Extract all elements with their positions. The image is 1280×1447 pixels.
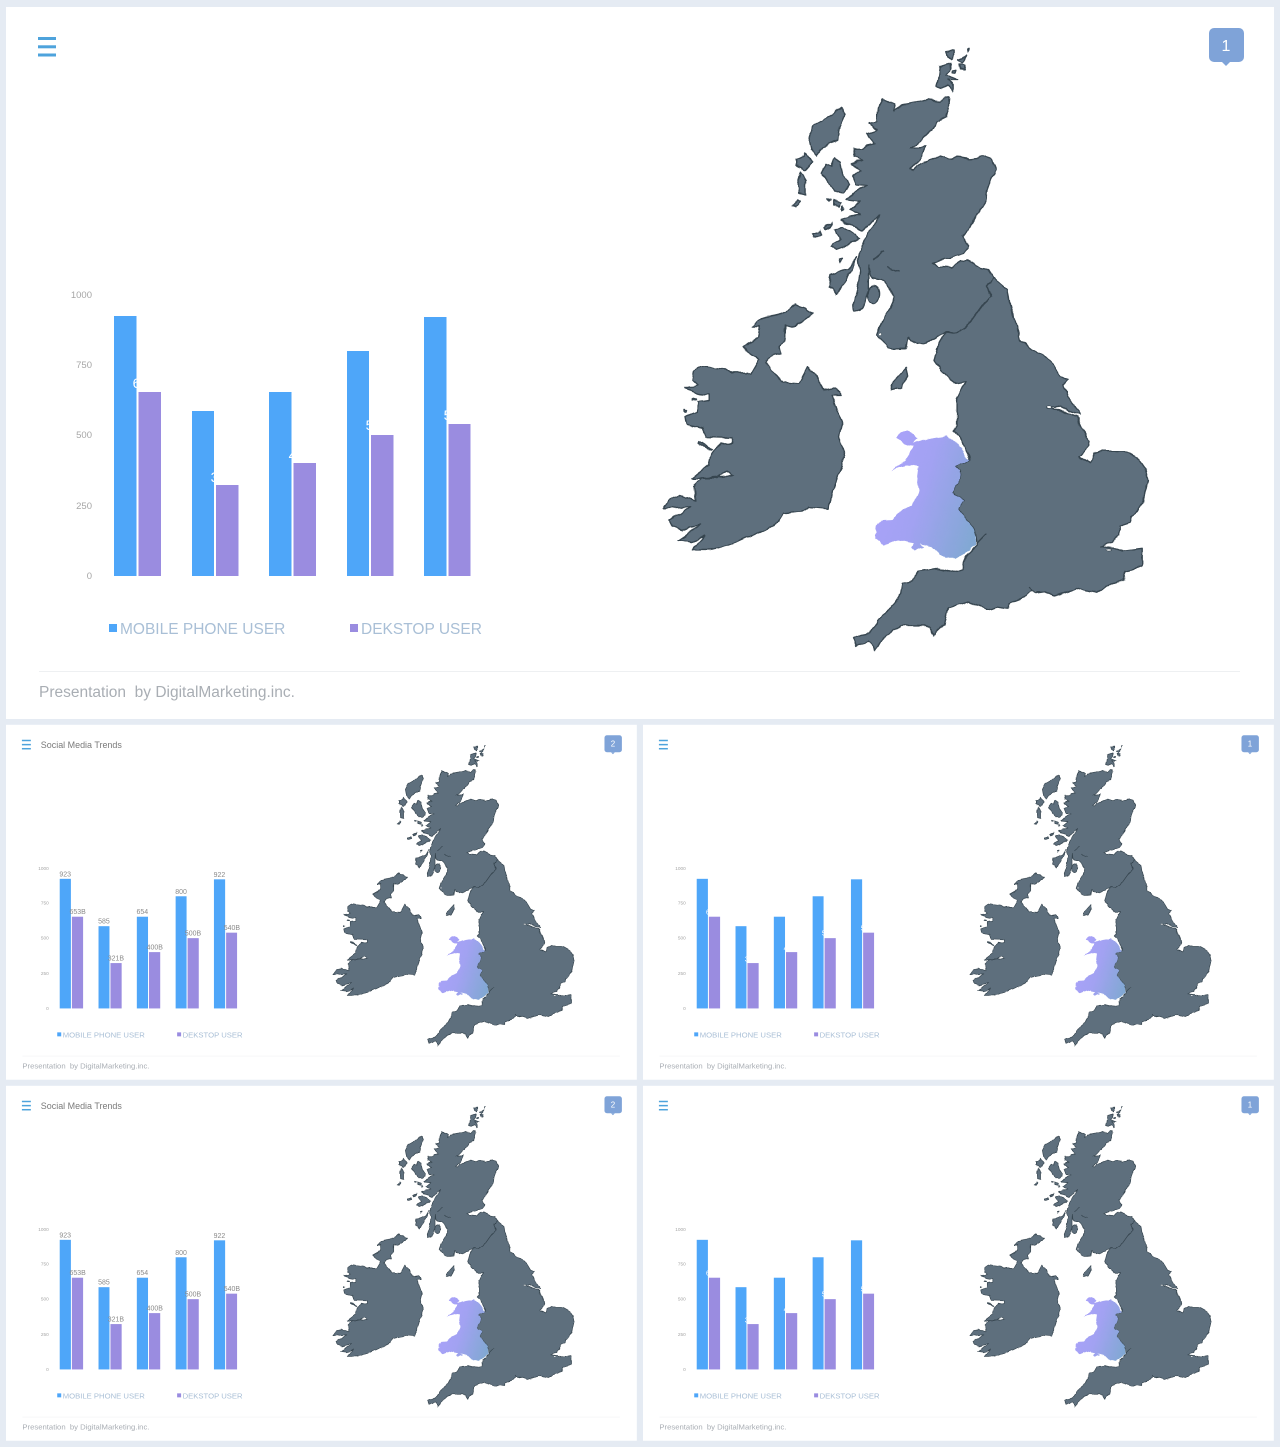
footer text: Presentation by DigitalMarketing.inc. [22,1423,149,1432]
y axis labels: 250 [678,971,686,977]
hidden-edge value labels [133,375,476,485]
value labels: 923 [59,871,71,878]
slide number badge [1241,1096,1259,1115]
y axis labels: 250 [76,501,92,512]
panel: slide thumbnail 1 [643,725,1274,1080]
legend: DEKSTOP USER [183,1391,243,1400]
value labels: 540B [224,1286,240,1293]
hidden-edge value labels: 653B [706,910,723,917]
value labels: 800 [175,1250,187,1257]
footer text: Presentation by DigitalMarketing.inc. [22,1062,149,1071]
value labels: 654 [136,1270,148,1277]
y axis labels: 750 [76,360,92,371]
icon: menu [22,740,31,749]
hidden-edge value labels: 540B [444,407,476,423]
value labels [59,1232,240,1324]
icon: menu [22,1101,31,1110]
hidden-edge value labels [706,910,877,964]
value labels: 653B [69,1270,86,1277]
panel: slide thumbnail 1 repeat [643,1086,1274,1441]
panel: slide thumbnail 2 [6,725,637,1080]
y axis labels: 750 [678,901,686,907]
slide number badge [604,735,622,754]
y axis labels: 1000 [38,1227,49,1233]
y axis labels: 0 [683,1367,686,1373]
value labels: 500B [185,1292,202,1299]
value labels: 922 [214,872,225,879]
slide number badge: 2 [611,740,616,749]
legend: MOBILE PHONE USER [700,1030,782,1039]
hidden-edge value labels: 321B [745,957,761,964]
title: Social Media Trends [41,1101,122,1111]
y axis labels: 0 [46,1006,49,1012]
y axis labels: 500 [678,1297,686,1303]
bars [114,316,470,576]
value labels: 654 [136,909,148,916]
bar chart [71,290,476,582]
legend [694,1030,880,1039]
y axis labels: 0 [87,571,92,582]
y axis labels: 500 [678,936,686,942]
value labels: 653B [69,909,86,916]
value labels: 500B [185,931,202,938]
hidden-edge value labels: 540B [861,926,877,933]
legend [57,1391,243,1400]
slide number badge: 1 [1248,1101,1253,1110]
hidden-edge value labels: 500B [822,1292,839,1299]
slide number badge [604,1096,622,1115]
y axis labels: 250 [41,1332,49,1338]
bars [60,879,237,1008]
value labels: 800 [175,889,187,896]
hidden-edge value labels: 321B [211,469,243,485]
icon: menu [38,37,56,56]
bar chart [38,866,240,1012]
hidden-edge value labels: 400B [289,447,321,463]
legend: DEKSTOP USER [820,1030,880,1039]
icon: menu [659,1101,668,1110]
hidden-edge value labels: 400B [784,1307,800,1314]
slide number badge: 1 [1222,38,1231,55]
y axis labels [675,866,686,1012]
hidden-edge value labels: 321B [745,1318,761,1325]
hidden-edge value labels [706,1271,877,1325]
value labels: 585 [98,919,110,926]
y axis labels: 750 [41,901,49,907]
legend: DEKSTOP USER [361,621,482,638]
hidden-edge value labels: 540B [861,1287,877,1294]
slide number badge: 1 [1248,740,1253,749]
legend: MOBILE PHONE USER [63,1391,145,1400]
bars [697,1240,874,1369]
hidden-edge value labels: 653B [133,375,165,391]
footer text: Presentation by DigitalMarketing.inc. [659,1062,786,1071]
legend: DEKSTOP USER [183,1030,243,1039]
value labels: 585 [98,1280,110,1287]
y axis labels: 0 [683,1006,686,1012]
y axis labels: 750 [41,1262,49,1268]
panel: slide thumbnail 2 repeat [6,1086,637,1441]
slide number badge [1209,28,1244,66]
y axis labels [38,866,49,1012]
y axis labels [675,1227,686,1373]
value labels: 400B [147,945,163,952]
title: Social Media Trends [41,740,122,750]
bar chart [38,1227,240,1373]
panel: main slide [6,7,1274,719]
y axis labels: 250 [41,971,49,977]
bar chart [675,1227,877,1373]
value labels: 321B [108,956,124,963]
icon: menu [659,740,668,749]
y axis labels: 500 [41,1297,49,1303]
legend [109,621,482,638]
y axis labels: 1000 [675,866,686,872]
legend: MOBILE PHONE USER [700,1391,782,1400]
y axis labels: 0 [46,1367,49,1373]
map: UK and Ireland with Wales highlighted [970,745,1211,1046]
value labels: 923 [59,1232,71,1239]
hidden-edge value labels: 400B [784,946,800,953]
value labels: 922 [214,1233,225,1240]
y axis labels [38,1227,49,1373]
value labels: 540B [224,925,240,932]
legend [57,1030,243,1039]
bar chart [675,866,877,1012]
bars [697,879,874,1008]
footer text: Presentation by DigitalMarketing.inc. [39,684,295,701]
map: UK and Ireland with Wales highlighted [333,745,574,1046]
bars [60,1240,237,1369]
slide number badge [1241,735,1259,754]
y axis labels: 1000 [71,290,92,301]
slide number badge: 2 [611,1101,616,1110]
map: UK and Ireland with Wales highlighted [970,1106,1211,1407]
y axis labels: 500 [76,430,92,441]
value labels: 321B [108,1317,124,1324]
map: UK and Ireland with Wales highlighted [664,48,1148,651]
y axis labels: 1000 [38,866,49,872]
map: UK and Ireland with Wales highlighted [333,1106,574,1407]
value labels: 400B [147,1306,163,1313]
y axis labels [71,290,92,582]
y axis labels: 750 [678,1262,686,1268]
y axis labels: 500 [41,936,49,942]
legend [694,1391,880,1400]
legend: DEKSTOP USER [820,1391,880,1400]
hidden-edge value labels: 500B [366,417,398,433]
y axis labels: 250 [678,1332,686,1338]
y axis labels: 1000 [675,1227,686,1233]
value labels [59,871,240,963]
legend: MOBILE PHONE USER [63,1030,145,1039]
hidden-edge value labels: 500B [822,931,839,938]
legend: MOBILE PHONE USER [120,621,285,638]
footer text: Presentation by DigitalMarketing.inc. [659,1423,786,1432]
hidden-edge value labels: 653B [706,1271,723,1278]
